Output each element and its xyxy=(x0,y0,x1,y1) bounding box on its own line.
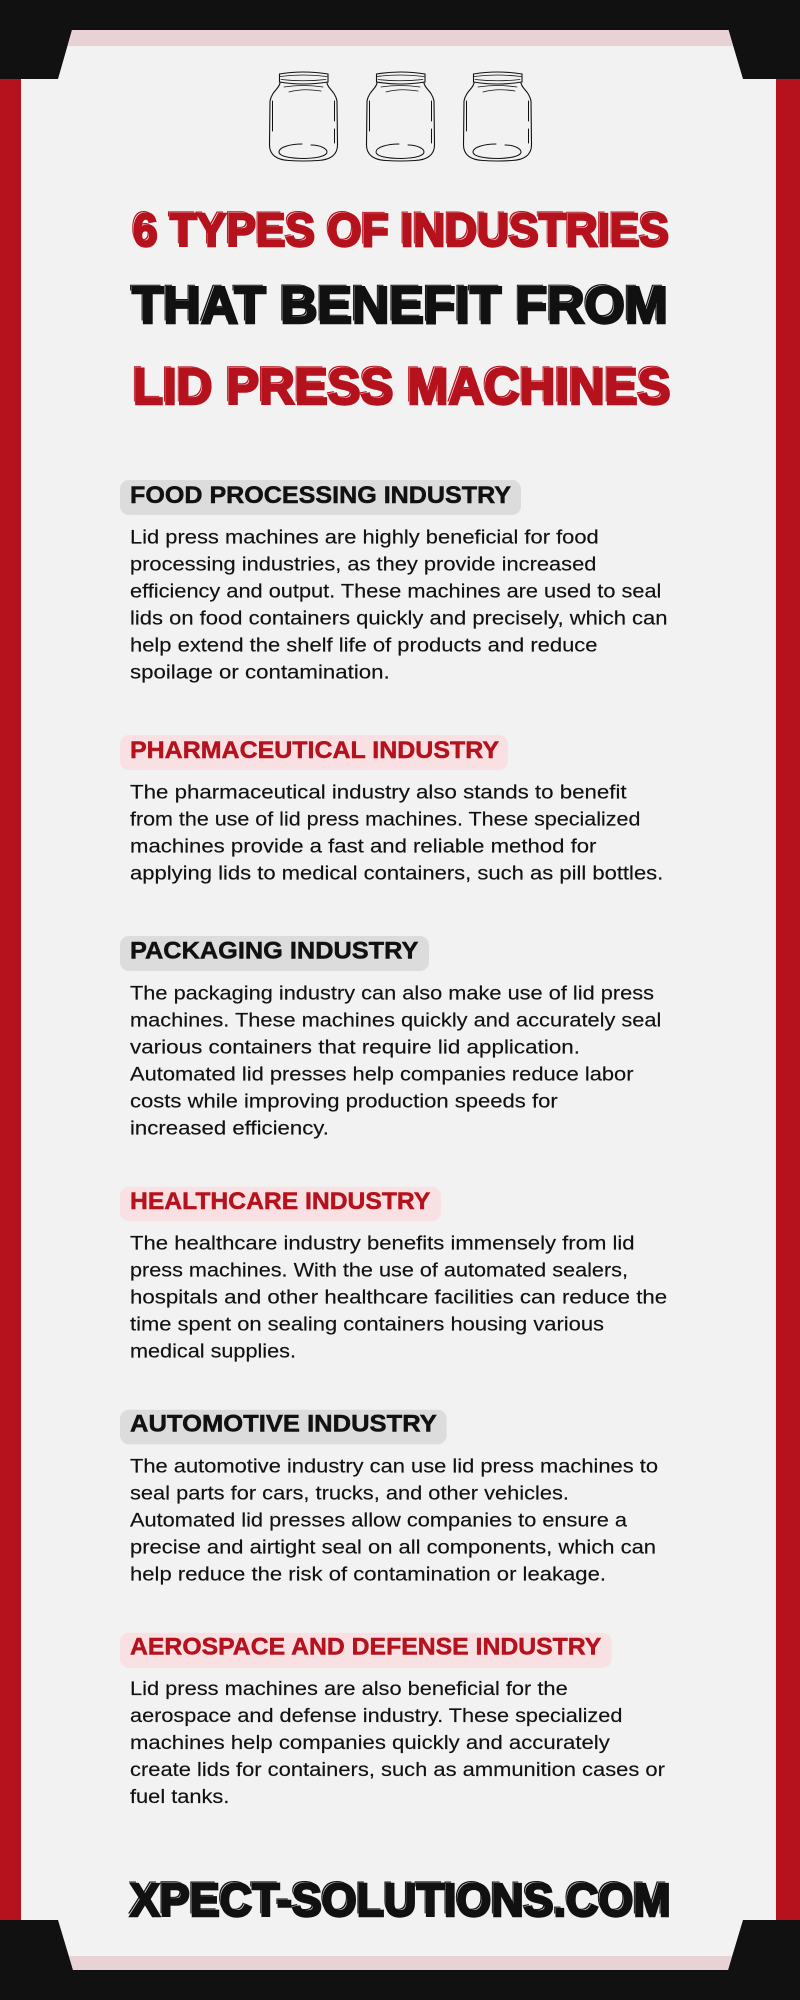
title xyxy=(130,204,670,414)
heading: healthcare industry: HEALTHCARE INDUSTRY xyxy=(130,1188,430,1215)
text block: pharmaceutical body: applying lids to medical containers, such as pill bottles. xyxy=(130,863,663,884)
text block: automotive body: help reduce the risk of contamination or leakage. xyxy=(130,1564,606,1585)
text block: aerospace body: aerospace and defense industry. These specialized xyxy=(130,1706,622,1727)
bottom pink strip xyxy=(69,1956,732,1970)
top black header band xyxy=(0,0,800,79)
text block: pharmaceutical body: The pharmaceutical industry also stands to benefit xyxy=(130,782,627,803)
text block: healthcare body xyxy=(130,1233,667,1362)
text block: food processing body xyxy=(130,527,668,683)
panel: food processing industry xyxy=(120,480,668,683)
heading: packaging industry xyxy=(120,936,429,971)
text block: healthcare body: time spent on sealing containers housing various xyxy=(130,1314,604,1335)
panel: aerospace and defense industry xyxy=(120,1633,666,1808)
heading: automotive industry: AUTOMOTIVE INDUSTRY xyxy=(130,1411,437,1438)
text block: food processing body: spoilage or contamination. xyxy=(130,662,390,683)
heading: pharmaceutical industry: PHARMACEUTICAL INDUSTRY xyxy=(130,737,499,764)
heading: packaging industry: PACKAGING INDUSTRY xyxy=(130,938,418,965)
text block: packaging body: Automated lid presses help companies reduce labor xyxy=(130,1064,634,1085)
top pink strip xyxy=(68,30,733,46)
text block: automotive body: The automotive industry can use lid press machines to xyxy=(130,1456,658,1477)
text block: packaging body: various containers that require lid application. xyxy=(130,1037,580,1058)
title line 2: THAT BENEFIT FROM xyxy=(132,277,667,335)
text block: pharmaceutical body: machines provide a fast and reliable method for xyxy=(130,836,597,857)
text block: aerospace body xyxy=(130,1679,666,1808)
text block: pharmaceutical body: from the use of lid press machines. These specialized xyxy=(130,809,640,830)
text block: packaging body: increased efficiency. xyxy=(130,1118,329,1139)
text block: automotive body: Automated lid presses allow companies to ensure a xyxy=(130,1510,627,1531)
right red side band xyxy=(776,79,800,1920)
text block: automotive body: seal parts for cars, trucks, and other vehicles. xyxy=(130,1483,569,1504)
text block: healthcare body: hospitals and other healthcare facilities can reduce the xyxy=(130,1287,667,1308)
panel: healthcare industry xyxy=(120,1187,667,1362)
text block: food processing body: help extend the shelf life of products and reduce xyxy=(130,635,598,656)
panel: packaging industry xyxy=(120,936,661,1139)
text block: packaging body: The packaging industry can also make use of lid press xyxy=(130,983,654,1004)
left red side band xyxy=(0,79,21,1920)
panel: automotive industry xyxy=(120,1410,658,1585)
text block: automotive body: precise and airtight seal on all components, which can xyxy=(130,1537,656,1558)
text block: packaging body xyxy=(130,983,661,1139)
text block: aerospace body: fuel tanks. xyxy=(130,1787,229,1808)
icon: three glass jars xyxy=(270,72,532,161)
text block: aerospace body: machines help companies quickly and accurately xyxy=(130,1733,610,1754)
footer website address: XPECT-SOLUTIONS.COM xyxy=(130,1874,671,1926)
text block: food processing body: Lid press machines are highly beneficial for food xyxy=(130,527,599,548)
text block: food processing body: efficiency and output. These machines are used to seal xyxy=(130,581,661,602)
text block: healthcare body: press machines. With the use of automated sealers, xyxy=(130,1260,628,1281)
title line 3: LID PRESS MACHINES xyxy=(132,358,670,414)
icon: jar 2 xyxy=(366,72,434,161)
icon: jar 3 xyxy=(464,72,532,161)
bottom black footer band xyxy=(0,1920,800,2000)
text block: healthcare body: The healthcare industry benefits immensely from lid xyxy=(130,1233,635,1254)
text block: aerospace body: create lids for containers, such as ammunition cases or xyxy=(130,1760,666,1781)
text block: food processing body: processing industries, as they provide increased xyxy=(130,554,596,575)
text block: aerospace body: Lid press machines are also beneficial for the xyxy=(130,1679,568,1700)
text block: food processing body: lids on food containers quickly and precisely, which can xyxy=(130,608,668,629)
heading: aerospace and defense industry: AEROSPACE AND DEFENSE INDUSTRY xyxy=(130,1633,601,1660)
text block: automotive body xyxy=(130,1456,658,1585)
text block: healthcare body: medical supplies. xyxy=(130,1341,296,1362)
icon: jar 1 xyxy=(270,72,338,161)
panel: pharmaceutical industry xyxy=(120,735,663,884)
text block: packaging body: costs while improving production speeds for xyxy=(130,1091,558,1112)
text block: packaging body: machines. These machines quickly and accurately seal xyxy=(130,1010,661,1031)
text block: pharmaceutical body xyxy=(130,782,663,884)
title line 1: 6 TYPES OF INDUSTRIES xyxy=(133,204,669,256)
heading: food processing industry: FOOD PROCESSING INDUSTRY xyxy=(130,482,511,509)
